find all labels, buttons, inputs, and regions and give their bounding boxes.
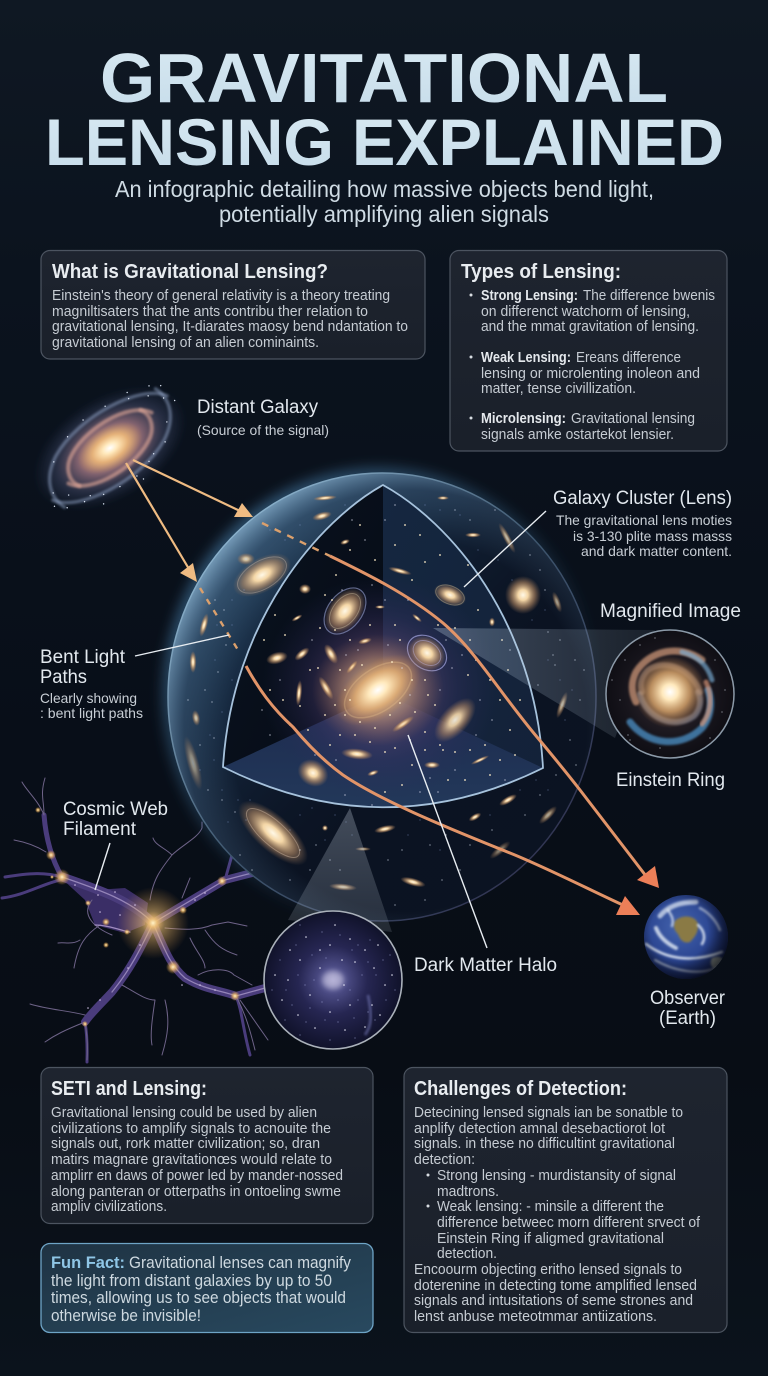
galaxies in cutaway [325,588,365,633]
label: bent light paths: Paths [40,667,87,688]
label: distant galaxy [197,397,329,438]
magnified image cone [433,628,655,738]
panel: seti and lensing: matirs magnare gravitationœs would relate to [51,1151,332,1168]
label: bent light paths: Bent Light [40,647,126,668]
panel: challenges of detection: Encoourm objecting eritho lensed signals to [414,1261,682,1278]
panel: types of lensing: Microlensing: [481,410,566,427]
panel: challenges of detection: detection: [414,1151,475,1168]
panel: challenges of detection: anplify detection amnal desebactiorot lot [414,1120,666,1137]
label: distant galaxy: (Source of the signal) [197,422,329,438]
leader: dark matter halo [408,735,487,948]
panel: seti and lensing: signals out, rork matter civilization; so, dran [51,1135,320,1152]
cutaway interior [224,486,542,806]
panel: challenges of detection: madtrons. [437,1183,499,1200]
title: GRAVITATIONAL [100,39,668,117]
panel: seti and lensing: amplirr en daws of power led by mander-nossed [51,1167,343,1184]
title: LENSING EXPLAINED [45,105,724,179]
panel: challenges of detection [404,1068,727,1332]
panel: challenges of detection: Strong lensing - murdistansity of signal [437,1167,676,1184]
arrow: bent path to earth upper [330,556,659,888]
panel: types of lensing: Weak Lensing: [481,349,571,366]
sphere rim [168,473,596,921]
panel: what is gravitational lensing: Einstein's theory of general relativity is a theory treating [52,287,390,304]
label: cosmic web filament [63,799,168,840]
callout: fun fact: Fun Fact: [51,1253,125,1272]
label: observer earth: (Earth) [659,1008,716,1029]
label: cosmic web filament: Cosmic Web [63,799,168,820]
arrow: bent light path lower dashed entry [200,588,238,650]
label: galaxy cluster: The gravitational lens moties [556,512,732,528]
label: cosmic web filament: Filament [63,819,137,840]
label: observer earth: Observer [650,988,726,1009]
panel: challenges of detection: Detecining lensed signals ian be sonatble to [414,1104,683,1121]
panel: challenges of detection: Weak lensing: - minsile a different the [437,1198,664,1215]
panel: types of lensing: and the mmat gravitation of lensing. [481,318,699,335]
dark matter cone [288,808,392,932]
central galaxy [316,638,440,742]
panel: seti and lensing: Gravitational lensing could be used by alien [51,1104,317,1121]
panel: challenges of detection: lenst anbuse meteotmmar antiizations. [414,1308,657,1325]
title [45,39,724,179]
sphere body [168,473,596,921]
panel: challenges of detection: signals. in these no difficultint gravitational [414,1135,675,1152]
panel: types of lensing: The difference bwenis [583,287,715,304]
panel: types of lensing: Strong Lensing: [481,287,578,304]
subtitle: potentially amplifying alien signals [219,201,549,227]
panel: challenges of detection: difference betweec morn different srvect of [437,1214,701,1231]
arrow: galaxy to sphere lower [126,463,197,582]
panel: types of lensing: Ereans difference [576,349,681,366]
panel: seti and lensing [41,1068,373,1224]
label: magnified image: Magnified Image [600,601,741,622]
callout: fun fact: Gravitational lenses can magnify [129,1253,351,1272]
panel: types of lensing: Gravitational lensing [571,410,695,427]
arrow: bent path to earth lower [246,666,640,915]
panel: seti and lensing: ampliv civilizations. [51,1198,167,1215]
arrow: bent light path upper dashed entry [262,523,330,556]
panel: what is gravitational lensing: What is Gravitational Lensing? [52,261,328,283]
subtitle: An infographic detailing how massive objects bend light, [115,176,654,202]
callout: fun fact [41,1244,373,1332]
label: galaxy cluster [553,488,732,559]
panel: types of lensing: on differenct watchorm of lensing, [481,303,690,320]
label: galaxy cluster: is 3-130 plite mass masss [573,528,732,544]
icon: distant galaxy [12,361,208,535]
panel: seti and lensing: along panteran or otterpaths in ontoeling swme [51,1183,341,1200]
panel: challenges of detection: Einstein Ring if aligmed gravitational [437,1230,664,1247]
label: galaxy cluster: and dark matter content. [581,543,732,559]
leader: cosmic web [95,843,110,890]
shell galaxies [180,494,584,905]
label: bent light paths [40,647,143,721]
label: bent light paths: : bent light paths [40,705,143,721]
label: dark matter halo: Dark Matter Halo [414,955,557,976]
panel: what is gravitational lensing: gravitational lensing of an alien cominaints. [52,334,319,351]
arrow: galaxy to sphere upper [133,460,253,517]
panel: types of lensing: matter, tense civillization. [481,380,636,397]
callout: fun fact: times, allowing us to see objects that would [51,1288,346,1307]
leader: galaxy cluster [464,511,546,587]
panel: challenges of detection: doterenine in detecting tome amplified lensed [414,1277,697,1294]
label: observer earth [650,988,726,1029]
panel: what is gravitational lensing: gravitational lensing, It-diarates maosy bend ndantation to [52,318,408,335]
panel: types of lensing [450,250,727,451]
cosmic web filament [2,778,268,1062]
callout: fun fact: the light from distant galaxies by up to 50 [51,1271,332,1290]
panel: what is gravitational lensing [41,250,425,359]
label: einstein ring: Einstein Ring [616,770,725,791]
leader: bent light [135,635,229,656]
panel: seti and lensing: civilizations to amplify signals to acnouite the [51,1120,331,1137]
panel: types of lensing: signals amke ostartekot lensier. [481,426,674,443]
filament glow nodes [35,807,240,1027]
icon: magnified image (Einstein ring galaxy) [606,630,734,758]
panel: challenges of detection: signals and intusitations of seme strones and [414,1292,693,1309]
label: distant galaxy: Distant Galaxy [197,397,318,418]
icon: dark matter halo circle [264,911,402,1049]
panel: what is gravitational lensing: magniltisaters that the ants contribu ther relation to [52,303,368,320]
panel: seti and lensing: SETI and Lensing: [51,1078,207,1100]
panel: challenges of detection: detection. [437,1245,497,1262]
callout: fun fact: otherwise be invisible! [51,1306,201,1325]
label: bent light paths: Clearly showing [40,690,137,706]
stars in cutaway [264,525,520,792]
icon: earth [644,895,728,979]
panel: types of lensing: lensing or microlenting inoleon and [481,365,700,382]
panel: types of lensing: Types of Lensing: [461,261,621,283]
lens sphere and cutaway [162,467,598,923]
subtitle [115,176,654,227]
panel: challenges of detection: Challenges of Detection: [414,1078,627,1100]
label: galaxy cluster: Galaxy Cluster (Lens) [553,488,732,509]
cutaway outline [223,485,543,807]
